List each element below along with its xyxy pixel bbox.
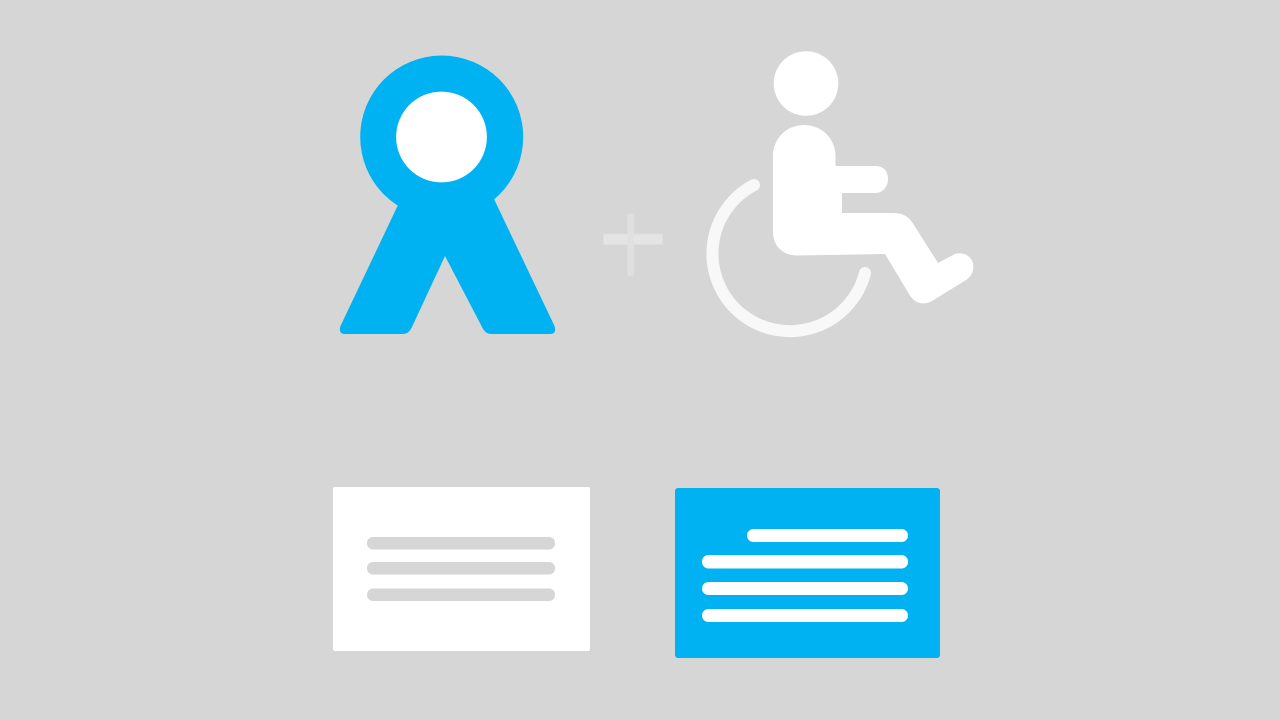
- icon: blue award ribbon: [340, 56, 555, 334]
- panel: white text card: [333, 487, 590, 651]
- icon: wheelchair user: [712, 51, 973, 331]
- white card text lines: [367, 537, 555, 601]
- panel: blue text card: [675, 488, 940, 658]
- blue card text lines: [702, 529, 908, 622]
- icon: plus sign: [604, 214, 662, 276]
